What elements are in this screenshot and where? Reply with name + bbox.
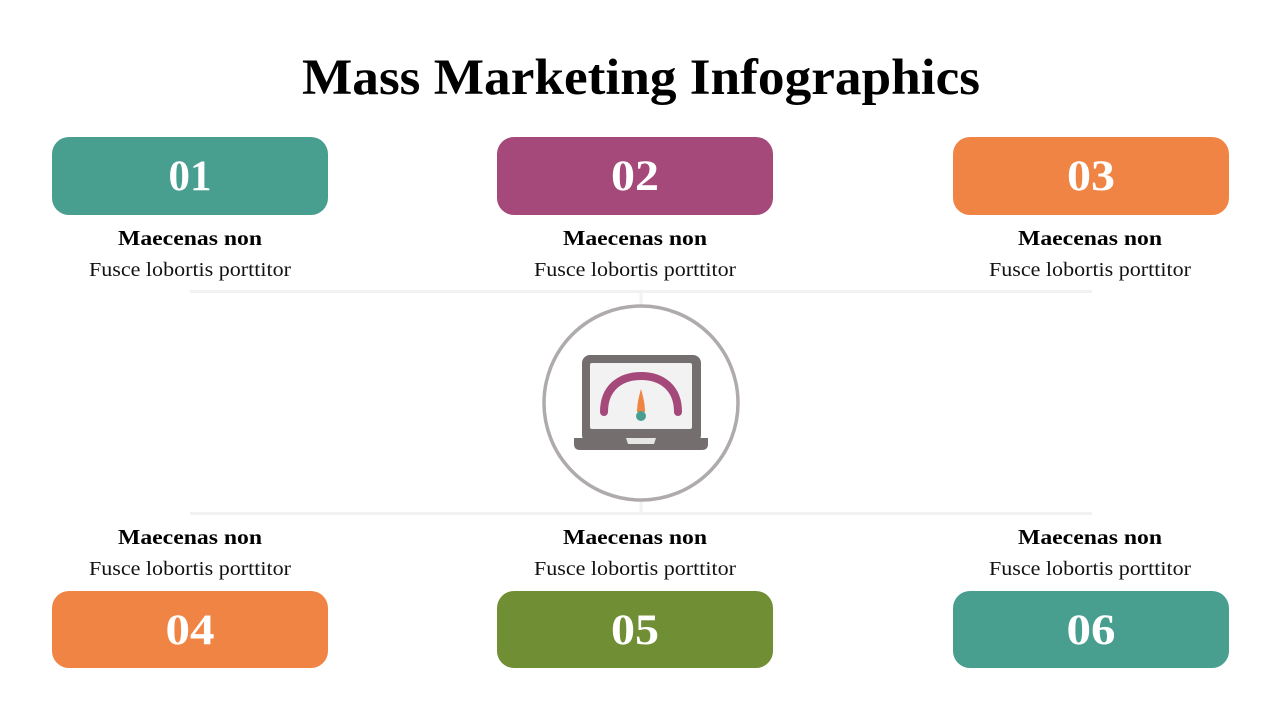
heading 05: Maecenas non [563, 525, 707, 549]
badge 06 [953, 591, 1229, 668]
heading 01: Maecenas non [118, 226, 262, 250]
panel: 05 [497, 525, 773, 668]
badge 04: 04 [166, 607, 214, 654]
heading 03: Maecenas non [1018, 226, 1162, 250]
badge 02: 02 [611, 153, 659, 200]
badge 01: 01 [168, 153, 212, 200]
panel: 01 [52, 137, 328, 281]
text 06: Fusce lobortis porttitor [989, 558, 1191, 580]
heading 02: Maecenas non [563, 226, 707, 250]
badge 04 [52, 591, 328, 668]
text 04: Fusce lobortis porttitor [89, 558, 291, 580]
text 01: Fusce lobortis porttitor [89, 259, 291, 281]
badge 01 [52, 137, 328, 215]
panel: 02 [497, 137, 773, 281]
text 02: Fusce lobortis porttitor [534, 259, 736, 281]
badge 05: 05 [611, 607, 659, 654]
panel: 06 [953, 525, 1229, 668]
badge 06: 06 [1066, 607, 1116, 654]
text 05: Fusce lobortis porttitor [534, 558, 736, 580]
text 03: Fusce lobortis porttitor [989, 259, 1191, 281]
heading 04: Maecenas non [118, 525, 262, 549]
heading 06: Maecenas non [1018, 525, 1162, 549]
panel: 04 [52, 525, 328, 668]
panel: 03 [953, 137, 1229, 281]
badge 02 [497, 137, 773, 215]
badge 03 [953, 137, 1229, 215]
icon: laptop with gauge in circle [544, 306, 738, 500]
badge 03: 03 [1067, 153, 1115, 200]
badge 05 [497, 591, 773, 668]
title: Mass Marketing Infographics [302, 50, 980, 106]
